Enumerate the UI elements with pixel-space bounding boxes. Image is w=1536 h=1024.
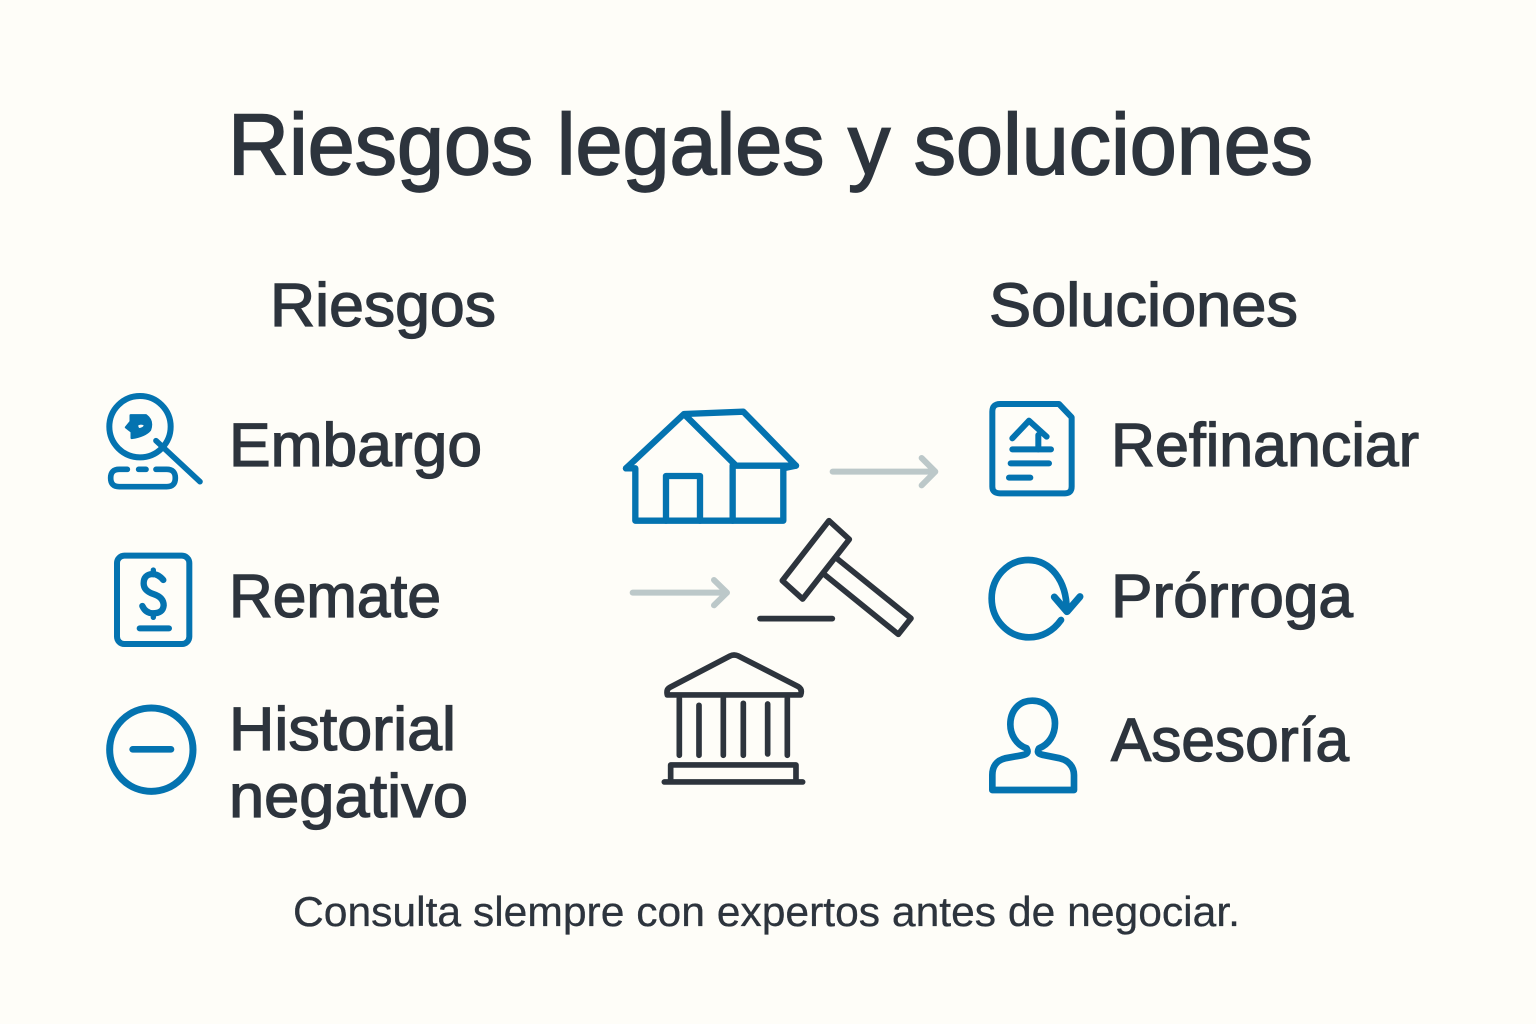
- icon: gavel: [760, 521, 911, 634]
- icon: person: [992, 701, 1074, 790]
- label: Historial negativo: [229, 695, 468, 830]
- footer note: Consulta slempre con expertos antes de negociar.: [293, 888, 1240, 935]
- label: Historial negativo: negativo: [229, 762, 468, 830]
- panel: central illustration: [626, 412, 935, 782]
- heading: Soluciones: Soluciones: [989, 271, 1298, 339]
- panel: riesgos: [109, 271, 496, 830]
- label: Asesoría: Asesoría: [1111, 706, 1349, 774]
- icon: magnifier over chain: [109, 396, 200, 487]
- heading: Riesgos: Riesgos: [270, 271, 496, 339]
- label: Prórroga: Prórroga: [1111, 562, 1353, 630]
- icon: refinance document: [992, 404, 1072, 493]
- icon: minus circle: [110, 708, 193, 791]
- icon: circular arrow: [992, 560, 1080, 637]
- arrow: to gavel: [633, 580, 727, 605]
- panel: soluciones: [989, 271, 1419, 790]
- title: Riesgos legales y soluciones: [228, 97, 1313, 193]
- icon: dollar document: [117, 556, 189, 644]
- label: Historial negativo: Historial: [229, 695, 456, 763]
- arrow: house to solutions: [833, 458, 935, 485]
- label: Refinanciar: Refinanciar: [1111, 411, 1419, 479]
- label: Embargo: Embargo: [229, 411, 482, 479]
- icon: bank building: [664, 655, 803, 782]
- label: Remate: Remate: [229, 562, 441, 630]
- icon: house: [626, 412, 796, 521]
